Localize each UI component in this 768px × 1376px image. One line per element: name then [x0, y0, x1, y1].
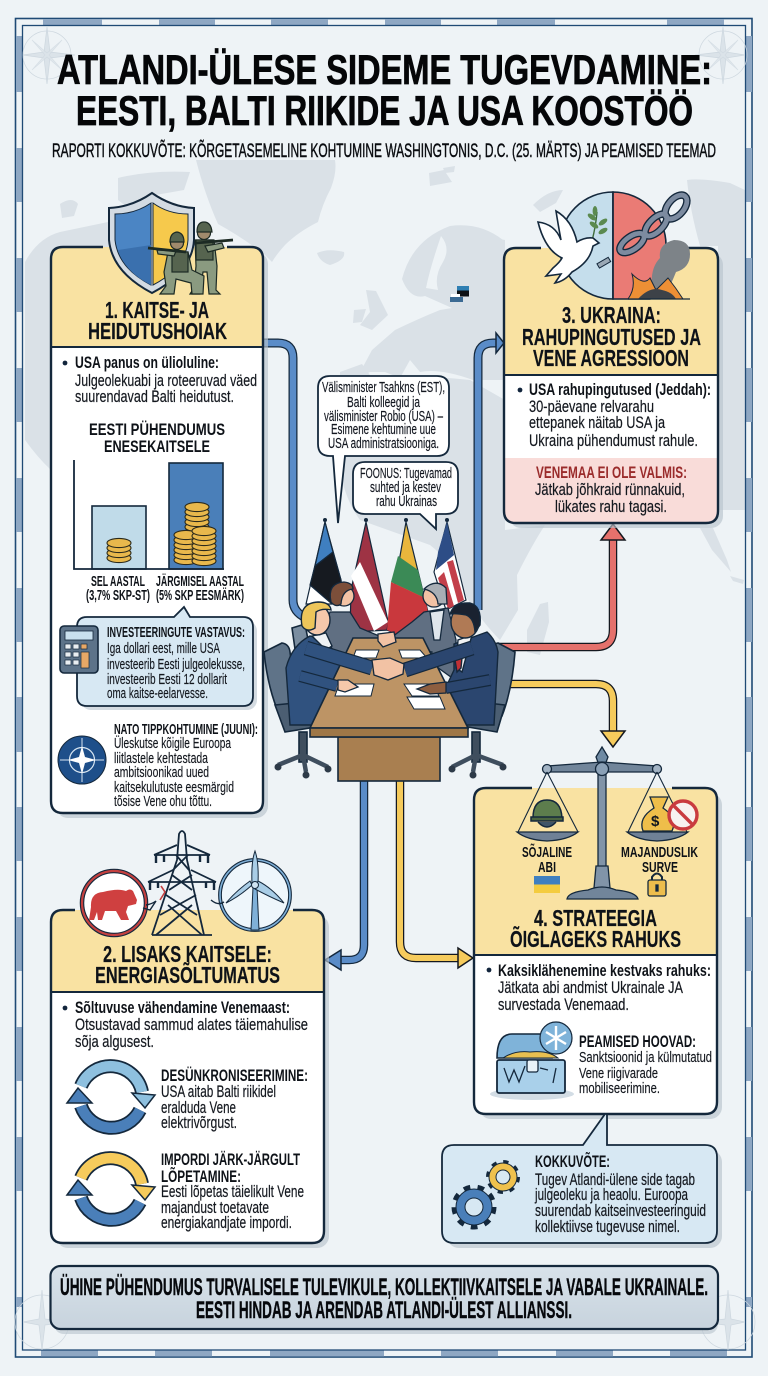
NATO summit text: liitlastele kehtestada [114, 750, 208, 767]
flag: Estonia [306, 522, 342, 604]
icon: gold gear [488, 1162, 518, 1192]
icon: transmission tower [148, 831, 216, 935]
icon: bear in circle [82, 871, 156, 935]
arms and handshakes [300, 632, 490, 694]
summary text: kollektiivse tugevuse nimel. [535, 1217, 680, 1236]
chairs [264, 624, 515, 778]
icon: blue gear [454, 1188, 494, 1226]
arrow: red to panel 3 [497, 524, 625, 647]
import phase-out text: IMPORDI JÄRK-JÄRGULT [161, 1150, 300, 1169]
callout: investment match: Iga dollari eest, mille USA [107, 640, 220, 657]
chart labels: JÄRGMISEL AASTAL [156, 573, 244, 590]
heading: VENE AGRESSIOON [533, 345, 689, 371]
desynchronisation text: DESÜNKRONISEERIMINE: [161, 1066, 308, 1085]
panel 4: strategy for just peace [474, 747, 722, 1119]
heading [510, 905, 681, 952]
callout: investment match: oma kaitse-eelarvesse. [107, 685, 208, 702]
bullet text: 30-päevane relvarahu [529, 397, 654, 416]
summary text: KOKKUVÕTE: [535, 1151, 610, 1171]
smoke and fire [652, 240, 690, 290]
heading [522, 302, 701, 371]
person: grey-haired man back right [392, 583, 456, 680]
icon: money bag with prohibition sign [642, 797, 697, 831]
title [57, 46, 712, 134]
person: dark-haired man front right [440, 603, 498, 725]
heading: ENERGIASÕLTUMATUS [95, 961, 280, 988]
chart labels [86, 573, 244, 604]
icon: import phase-out cycle [67, 1158, 155, 1220]
chart labels: (3,7% SKP-ST) [86, 587, 150, 604]
icon: calculator [60, 626, 98, 673]
olive branch [587, 206, 609, 241]
NATO summit text: tõsise Vene ohu tõttu. [114, 793, 212, 810]
arrow: yellow to panel 4 [510, 684, 625, 747]
heading: ÕIGLAGEKS RAHUKS [510, 925, 681, 952]
desynchronisation text: eralduda Vene [161, 1098, 236, 1117]
icon: shield with soldiers [109, 193, 233, 294]
summary text [534, 1151, 706, 1236]
summary text: julgeoleku ja heaolu. Euroopa [534, 1185, 688, 1204]
callout: investment match: investeerib Eesti julgeolekusse, [107, 656, 245, 673]
scale labels: SÕJALINE [522, 843, 572, 861]
speech bubble: ministers: USA administratsiooniga. [328, 436, 439, 452]
arrows: connectors from the central meeting to the panels [263, 333, 625, 970]
bullet text: Otsustavad sammud alates täiemahulise [75, 1015, 308, 1034]
NATO summit text: ambitsioonikad uued [114, 764, 209, 781]
warning text: VENEMAA EI OLE VALMIS: [536, 463, 687, 482]
chart heading [89, 420, 225, 456]
bullet text: suurendavad Balti heidutust. [75, 387, 234, 406]
flag: Latvia [350, 522, 390, 632]
background world map [25, 160, 745, 655]
icon: money bag with prohibition sign: $ [651, 813, 660, 830]
icon: padlock [648, 874, 666, 896]
bullet text [518, 380, 711, 450]
bullet text: Jätkata abi andmist Ukrainale JA [498, 978, 683, 997]
bullet text [63, 998, 308, 1051]
icon: helmet [531, 800, 563, 827]
heading: HEIDUTUSHOIAK [88, 318, 227, 344]
europe [357, 225, 505, 380]
desynchronisation text: USA aitab Balti riikidel [161, 1082, 276, 1101]
NATO summit text [114, 721, 258, 810]
arrow: to panel 3 [478, 333, 504, 610]
arrow: to panel 1 [263, 343, 306, 618]
heading: RAHUPINGUTUSED JA [522, 324, 701, 350]
callout: summary [442, 1114, 722, 1248]
import phase-out text: LÕPETAMINE: [161, 1166, 241, 1186]
illustration: flags and leaders at the table [264, 518, 515, 781]
chart labels: (5% SKP EESMÄRK) [156, 587, 244, 604]
bullet text [487, 961, 711, 1014]
flag: United States [434, 522, 466, 610]
import phase-out text: majandust toetavate [161, 1198, 269, 1217]
heading: 3. UKRAINA: [562, 302, 661, 328]
icon: desynchronisation cycle [67, 1066, 155, 1128]
warning text: lükates rahu tagasi. [555, 497, 667, 516]
panel 1: defence and deterrence [51, 193, 268, 818]
coins small [107, 538, 131, 563]
import phase-out text: energiakandjate impordi. [161, 1213, 292, 1232]
bullet text: Ukraina pühendumust rahule. [529, 431, 698, 450]
africa [334, 376, 545, 640]
bullet text: Julgeolekuabi ja roteeruvad väed [75, 371, 257, 390]
arrow: yellow to panel 4 side [400, 775, 473, 968]
panel 3: Ukraine [504, 191, 723, 528]
scale labels: MAJANDUSLIK [621, 844, 698, 861]
bullet text: USA panus on ülioluline: [75, 353, 219, 372]
scale labels: SURVE [642, 859, 678, 876]
bullet text: survestada Venemaad. [498, 995, 629, 1014]
heading: 1. KAITSE- JA [105, 297, 209, 323]
callout: investment match: investeerib Eesti 12 dollarit [107, 671, 228, 688]
greenland [196, 160, 336, 262]
speech bubble: ministers [318, 376, 449, 523]
NATO summit text: kaitsekulutuste eesmärgid [114, 779, 234, 796]
speech bubble: ministers: välisminister Robio (USA) – [324, 409, 444, 425]
NATO summit text: NATO TIPPKOHTUMINE (JUUNI): [114, 721, 258, 738]
chart heading: EESTI PÜHENDUMUS [89, 420, 225, 439]
speech bubble: focus [353, 462, 458, 529]
speech bubble: focus: FOONUS: Tugevamad [360, 466, 452, 482]
import phase-out text [161, 1150, 304, 1232]
key levers text: Sanktsioonid ja külmutatud [579, 1049, 712, 1066]
desynchronisation text: elektrivõrgust. [161, 1113, 237, 1132]
soldiers [148, 222, 233, 294]
dove [538, 211, 599, 283]
russia and asia [533, 190, 563, 212]
icon: frozen treasure chest [490, 1022, 574, 1100]
chain [617, 191, 691, 256]
bar chart [74, 460, 224, 569]
summary text: Tugev Atlandi-ülene side tagab [535, 1170, 695, 1189]
bullet text: ettepanek näitab USA ja [529, 413, 665, 432]
import phase-out text: Eesti lõpetas täielikult Vene [161, 1182, 304, 1201]
desynchronisation text [161, 1066, 308, 1132]
icon: dove and broken chain [538, 191, 691, 299]
speech bubble: ministers: Balti kolleegid ja [347, 395, 421, 411]
bullet text [63, 353, 257, 406]
person: woman back left [322, 582, 384, 672]
flag: Lithuania [387, 522, 428, 640]
icon: wind turbine in circle [211, 851, 290, 930]
icon: NATO emblem [58, 736, 106, 784]
heading [95, 941, 280, 988]
warning text: Jätkab jõhkraid rünnakuid, [535, 480, 685, 499]
coins large [174, 502, 216, 566]
arrow: blue to panel 2 [325, 775, 364, 970]
table [310, 638, 468, 781]
callout: investment match: INVESTEERINGUTE VASTAVUS: [107, 624, 245, 641]
speech bubble: ministers: Esimene kehtumine uue [331, 422, 436, 438]
footer banner [50, 1266, 718, 1334]
warning text [535, 463, 687, 516]
key levers text: Vene riigivarade [579, 1065, 658, 1082]
heading [88, 297, 227, 344]
person: blonde man front left [286, 602, 345, 725]
key levers text: mobiliseerimine. [579, 1080, 660, 1097]
speech bubble: focus: rahu Ukrainas [376, 494, 437, 510]
icon: balance scale [517, 747, 688, 899]
chart heading: ENESEKAITSELE [104, 437, 210, 456]
callout: investment match [60, 607, 257, 710]
panel 2: energy independence [51, 831, 329, 1248]
heading: 4. STRATEEGIA [534, 905, 657, 931]
speech bubble: ministers: Välisminister Tsahkns (EST), [322, 380, 445, 396]
bullet text: sõja algusest. [75, 1032, 154, 1051]
speech bubble: focus: suhted ja kestev [370, 480, 442, 496]
chart labels: SEL AASTAL [91, 573, 145, 590]
scale labels: ABI [538, 859, 556, 876]
key levers text: PEAMISED HOOVAD: [579, 1032, 696, 1051]
heading: 2. LISAKS KAITSELE: [103, 941, 272, 967]
icon: Estonia highlighted on the map [450, 286, 469, 302]
bullet text: Sõltuvuse vähendamine Venemaast: [75, 998, 290, 1017]
icon: Ukrainian flag [534, 876, 560, 893]
scale labels [522, 843, 698, 876]
NATO summit text: Üleskutse kõigile Euroopa [114, 734, 231, 752]
key levers text [579, 1032, 712, 1097]
